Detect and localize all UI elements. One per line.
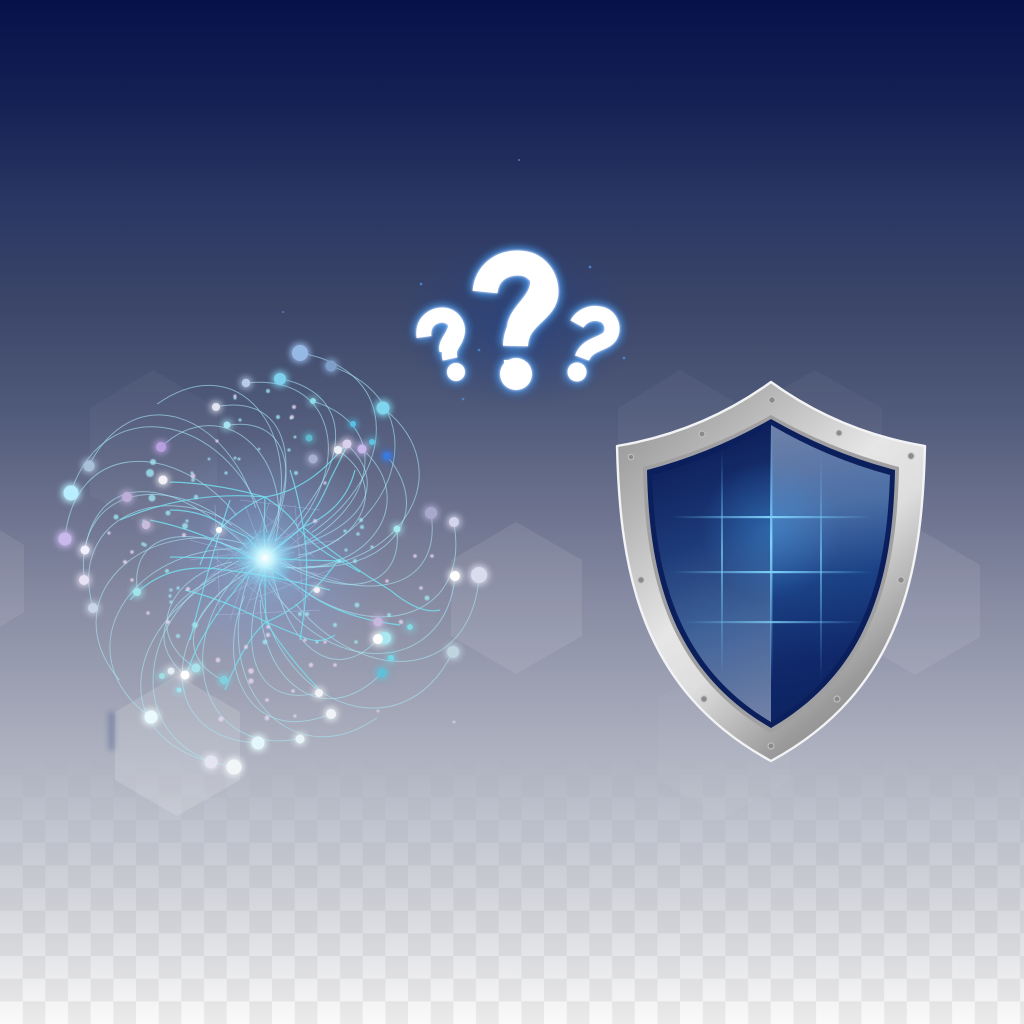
large glowing nodes bbox=[58, 345, 487, 774]
fine secondary mesh bbox=[190, 500, 340, 620]
inner bright mesh lines bbox=[120, 440, 440, 690]
outer spiral arcs bbox=[65, 353, 479, 768]
inner bevel bbox=[643, 415, 899, 733]
question mark backing shade bbox=[398, 240, 638, 410]
small left question mark: ? bbox=[415, 276, 469, 396]
hexagon shadow smudge bbox=[109, 712, 114, 750]
metal rim bbox=[617, 382, 925, 761]
small right question mark: ? bbox=[559, 279, 630, 401]
blue panels and grid bbox=[653, 425, 890, 722]
shield bbox=[617, 382, 925, 761]
navy band bbox=[647, 419, 895, 728]
tiny blue sparkles around question marks bbox=[282, 159, 625, 400]
centre core bbox=[235, 528, 295, 588]
checkerboard fade pattern bbox=[0, 874, 1024, 1024]
faint hexagon backdrop bbox=[0, 370, 980, 818]
large centre question mark: ? bbox=[480, 195, 552, 412]
centre haze bbox=[145, 438, 385, 678]
data swirl network bbox=[58, 345, 487, 774]
question marks group bbox=[408, 242, 628, 398]
rivets bbox=[628, 397, 914, 749]
small scattered particles bbox=[114, 389, 430, 661]
